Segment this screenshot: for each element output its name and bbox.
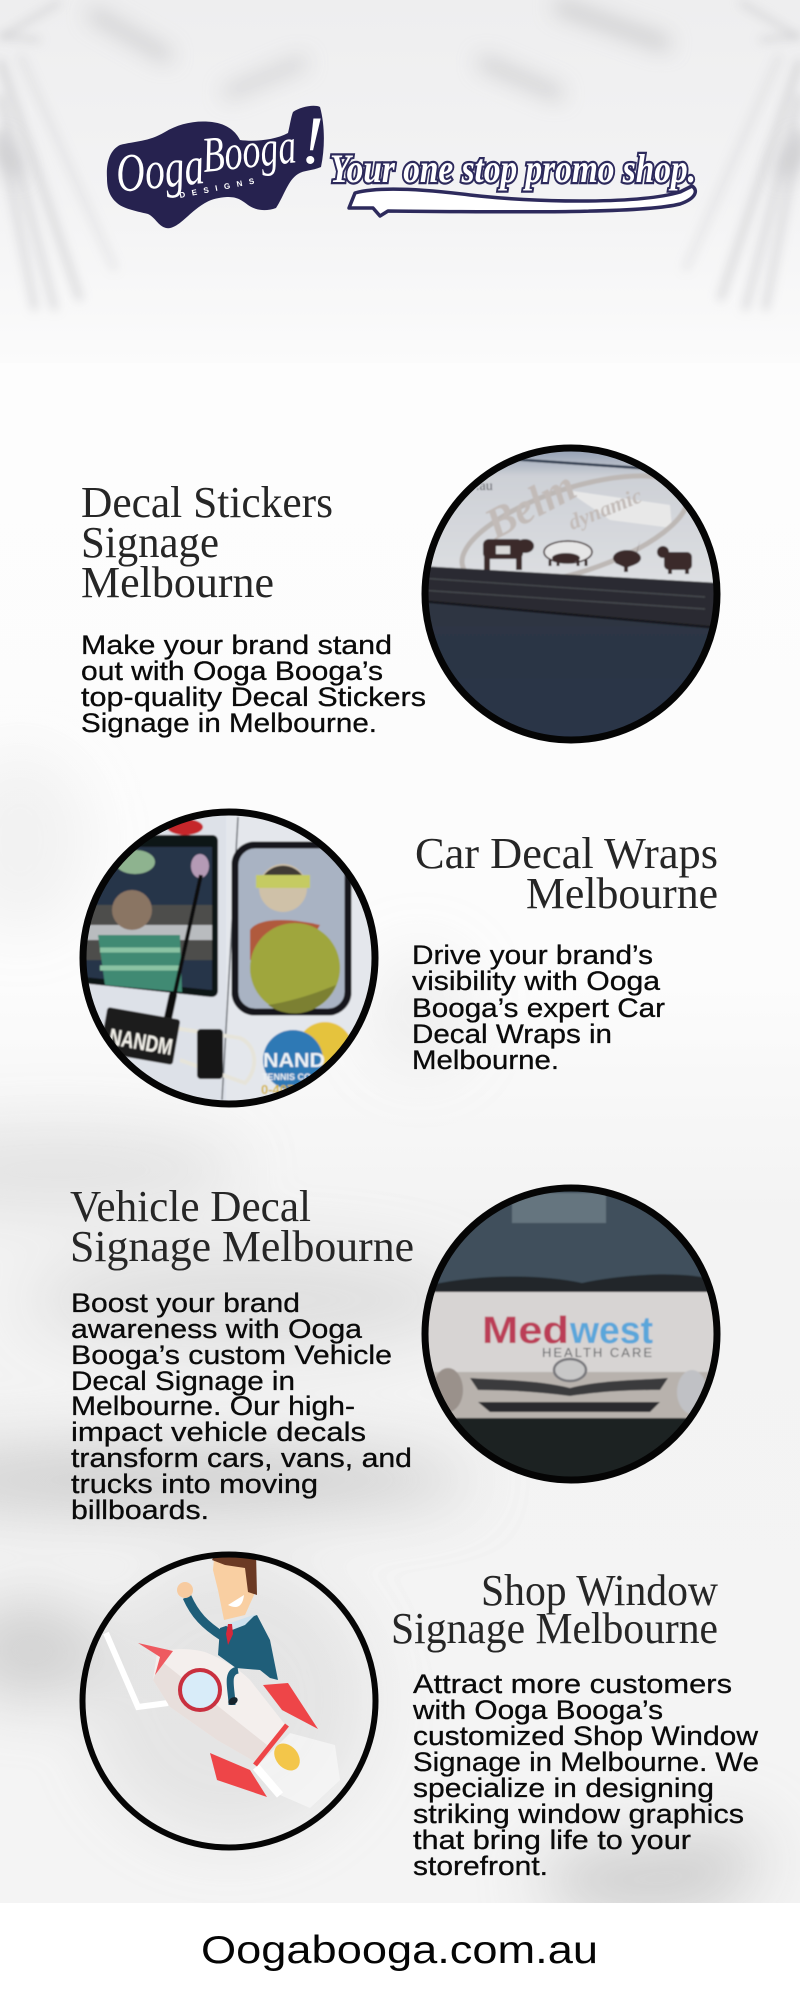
panel: car decal wraps <box>78 805 718 1111</box>
main background panel <box>0 363 800 1914</box>
logo: Ooga Booga Designs <box>107 102 324 228</box>
circular photo: window decal with farm animals <box>420 440 720 750</box>
body text: Drive your brand’s <box>412 940 653 970</box>
circular photo: van with Medwest decal <box>420 1185 722 1488</box>
heading: Shop Window <box>481 1566 718 1615</box>
circular photo: window decal with farm animals: dynamic <box>565 483 645 535</box>
body text: Melbourne. <box>412 1045 559 1075</box>
panel: vehicle decal signage <box>70 1182 722 1525</box>
body text: Attract more customers <box>413 1669 732 1699</box>
circular photo: van with Medwest decal: west <box>569 1310 653 1352</box>
circular photo: van with window decals: TENNIS CO <box>262 1072 311 1082</box>
circular illustration: businessman riding rocket <box>82 1552 376 1848</box>
body text: customized Shop Window <box>413 1721 759 1751</box>
circular photo: van with Medwest decal: Med <box>482 1310 569 1352</box>
body text <box>81 630 426 738</box>
body text: Signage in Melbourne. <box>81 708 377 738</box>
logo wordmark: Ooga <box>113 135 207 204</box>
body text: Signage in Melbourne. We <box>413 1747 759 1777</box>
heading: Vehicle Decal <box>70 1182 311 1231</box>
body text: Decal Wraps in <box>412 1019 612 1049</box>
body text <box>71 1288 412 1525</box>
body text: top-quality Decal Stickers <box>81 682 426 712</box>
body text: Make your brand stand <box>81 630 392 660</box>
logo badge shape <box>107 106 324 228</box>
heading <box>70 1182 414 1271</box>
circular photo: van with window decals: NANDM <box>107 1023 175 1060</box>
body text: that bring life to your <box>413 1825 691 1855</box>
heading: Decal Stickers <box>81 478 333 527</box>
circular photo: van with window decals: NAND <box>263 1050 325 1072</box>
header background with folds <box>0 0 800 316</box>
body text: Melbourne. Our high- <box>71 1391 355 1421</box>
tagline with swoosh <box>330 146 696 216</box>
circular photo: van with window decals <box>78 805 380 1111</box>
body text: awareness with Ooga <box>71 1314 362 1344</box>
body text: visibility with Ooga <box>412 966 660 996</box>
circular photo: van with window decals: 0-407 <box>261 1082 294 1097</box>
swoosh <box>349 186 695 216</box>
body text: Booga’s custom Vehicle <box>71 1340 392 1370</box>
heading: Melbourne <box>526 869 718 918</box>
body text: billboards. <box>71 1495 209 1525</box>
circular photo: window decal with farm animals: Belm <box>476 461 584 549</box>
heading: Signage Melbourne <box>70 1222 414 1271</box>
body text: trucks into moving <box>71 1469 318 1499</box>
heading <box>81 478 333 607</box>
body text: Booga’s expert Car <box>412 993 665 1023</box>
body text: specialize in designing <box>413 1773 714 1803</box>
heading: Signage Melbourne <box>391 1604 718 1653</box>
body text: Decal Signage in <box>71 1366 295 1396</box>
body text: impact vehicle decals <box>71 1417 366 1447</box>
body text: storefront. <box>413 1851 548 1881</box>
body text: transform cars, vans, and <box>71 1443 412 1473</box>
logo wordmark: ! <box>301 102 324 178</box>
heading: Signage <box>81 518 219 567</box>
heading <box>415 829 718 918</box>
logo wordmark <box>113 102 324 204</box>
panel: shop window signage <box>82 1552 759 1881</box>
logo wordmark: DESIGNS <box>179 176 258 200</box>
circular photo: window decal with farm animals: .au <box>476 479 493 494</box>
body text: striking window graphics <box>413 1799 744 1829</box>
heading: Melbourne <box>81 558 274 607</box>
footer band with website <box>0 1903 800 2000</box>
panel: decal stickers signage <box>81 440 720 750</box>
body text: Boost your brand <box>71 1288 300 1318</box>
logo wordmark: Booga <box>199 117 299 183</box>
website address: Oogabooga.com.au <box>201 1929 598 1972</box>
heading <box>391 1566 718 1653</box>
heading: Car Decal Wraps <box>415 829 718 878</box>
body text: out with Ooga Booga’s <box>81 656 383 686</box>
circular photo: van with Medwest decal: HEALTH CARE <box>542 1345 652 1360</box>
body text <box>412 1669 759 1881</box>
tagline text: Your one stop promo shop. <box>330 146 696 191</box>
body text <box>412 940 665 1075</box>
body text: with Ooga Booga’s <box>412 1695 663 1725</box>
